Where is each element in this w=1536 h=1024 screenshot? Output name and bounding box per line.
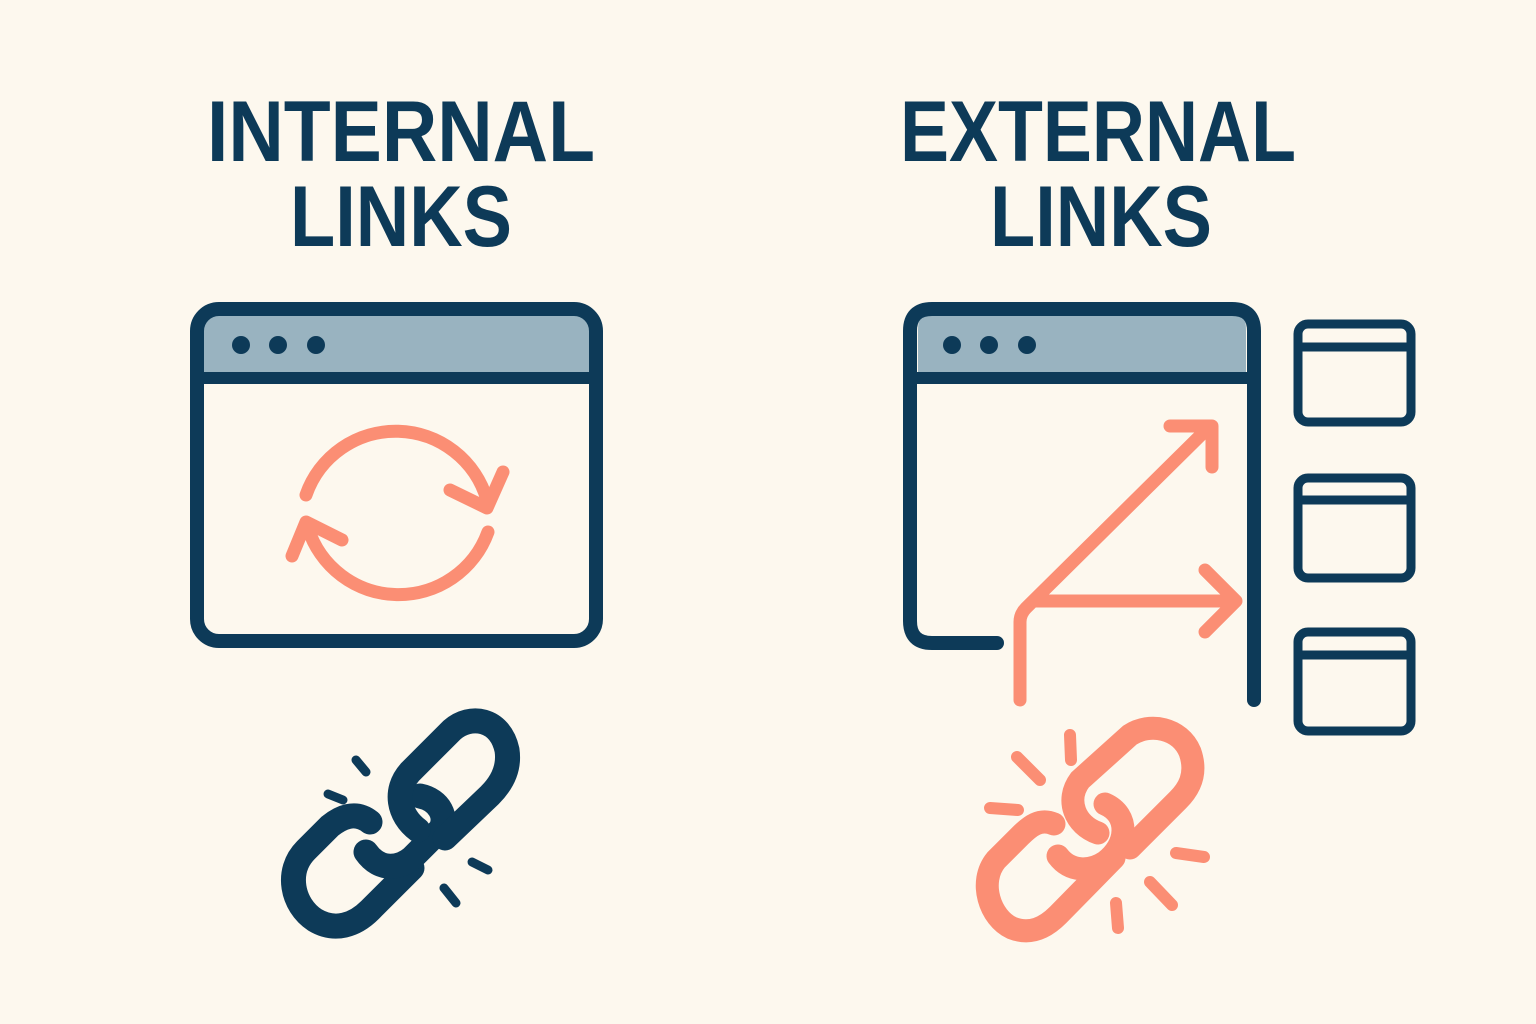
title: internal links	[207, 84, 595, 265]
title: internal links: INTERNAL	[207, 84, 595, 180]
title: external links: LINKS	[990, 169, 1212, 265]
icon: external browser window	[910, 309, 1254, 700]
icon: broken chain coral	[987, 728, 1204, 931]
title: external links: EXTERNAL	[900, 84, 1296, 180]
icon: small external windows	[1298, 324, 1411, 731]
icon: internal browser window	[197, 309, 596, 641]
icon: broken chain navy	[293, 721, 508, 926]
title: internal links: LINKS	[290, 169, 512, 265]
title: external links	[900, 84, 1296, 265]
icon: refresh arrows	[292, 431, 503, 595]
icon: outbound arrows	[1020, 426, 1236, 700]
